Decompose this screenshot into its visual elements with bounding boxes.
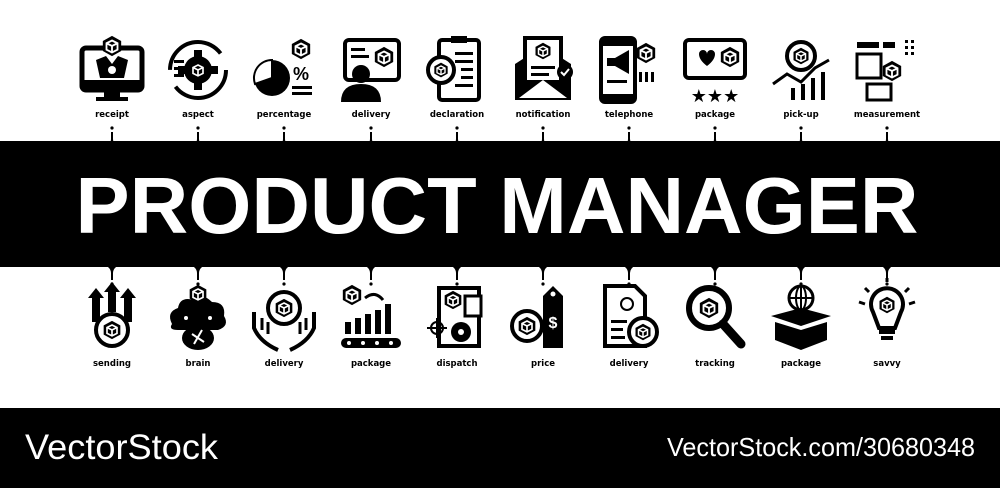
icon: price [512,286,563,348]
top labels: telephone [605,110,653,120]
icon: notification [515,38,573,100]
bottom labels: sending [93,359,131,369]
icon: tracking [689,288,741,344]
bottom labels: brain [186,359,210,369]
icon: savvy [859,278,915,340]
icon: package (box globe) [771,286,831,350]
icon: percentage [254,39,312,96]
icon: aspect [170,42,226,98]
top labels: percentage [257,110,312,120]
top labels: receipt [95,110,129,120]
icon: declaration [428,36,479,100]
bottom labels [93,359,901,369]
icon: brain [170,285,226,350]
icon: delivery (person chat) [341,40,399,102]
icon: package (conveyor) [341,285,401,348]
top labels: delivery [352,110,391,120]
icon: sending [88,282,136,346]
bottom labels: delivery [265,359,304,369]
footer url: VectorStock.com/30680348 [667,432,975,462]
bottom labels: package [351,359,391,369]
icon: delivery (document) [605,286,657,346]
title: PRODUCT MANAGER [76,161,918,250]
icon: percentage: % [293,64,309,84]
bottom labels: dispatch [436,359,478,369]
icon: dispatch [427,288,481,346]
icon: measurement [857,40,914,100]
icon: package (rating): ★★★ [691,86,739,107]
icon: receipt [82,36,142,101]
footer bar [0,408,1000,488]
top labels [95,110,920,120]
bottom labels: tracking [695,359,735,369]
bottom labels: package [781,359,821,369]
bottom labels: savvy [873,359,901,369]
icon: pick-up [773,42,829,100]
icon: price: $ [549,315,558,332]
top labels: pick-up [783,110,819,120]
top labels: notification [516,110,570,120]
top labels: measurement [854,110,920,120]
title band [0,141,1000,267]
icon: delivery (hands) [254,292,314,350]
bottom labels: delivery [610,359,649,369]
top connectors [102,126,897,148]
top labels: declaration [430,110,484,120]
icon: package (rating) [685,40,745,107]
bottom connectors [102,264,897,286]
icon: telephone [601,38,655,102]
top labels: aspect [182,110,214,120]
bottom labels: price [531,359,555,369]
top labels: package [695,110,735,120]
footer brand: VectorStock [25,428,219,467]
